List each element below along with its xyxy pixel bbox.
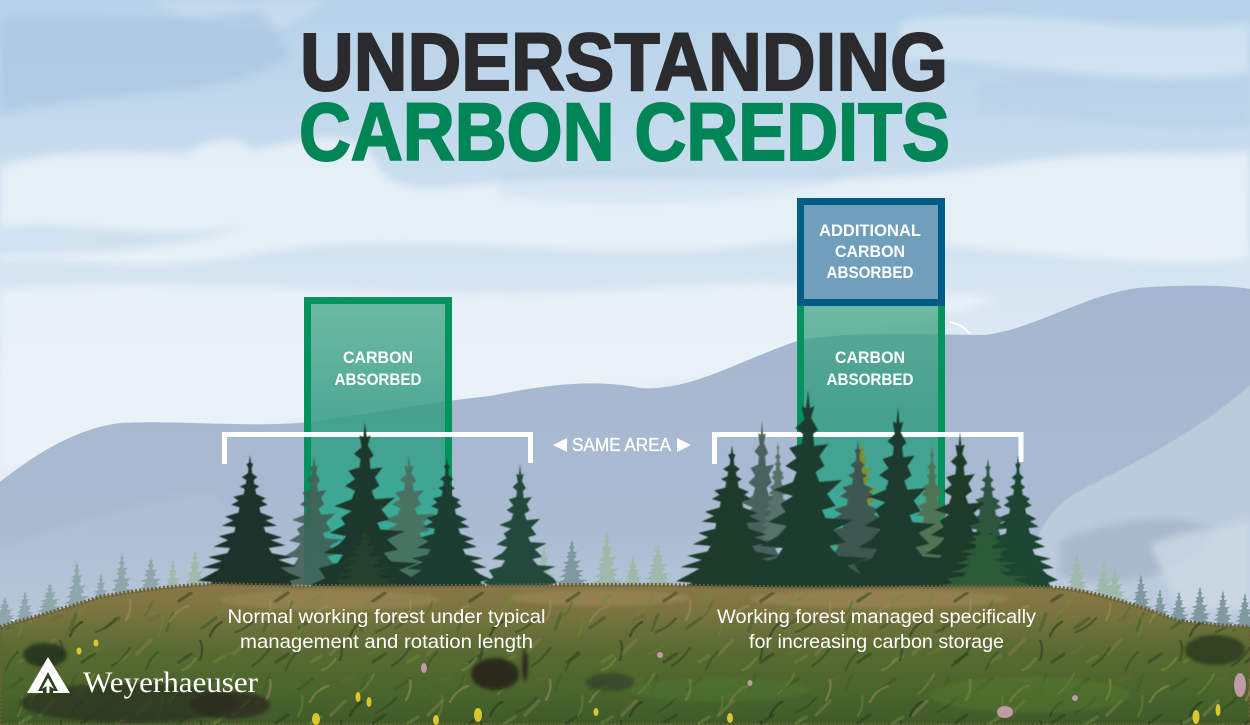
title: CARBON CREDITS — [299, 87, 950, 178]
distant tree line — [0, 530, 1250, 630]
description: carbon-managed forest — [717, 606, 1036, 653]
left area bracket — [224, 434, 530, 464]
additional carbon box: CARBON — [835, 243, 905, 261]
Weyerhaeuser logo: Weyerhaeuser — [83, 666, 258, 699]
additional carbon box: ABSORBED — [826, 264, 914, 282]
title: UNDERSTANDING — [300, 17, 948, 108]
description: normal working forest: Normal working forest under typical — [228, 606, 546, 628]
same area label: SAME AREA — [572, 435, 671, 455]
mountains — [0, 286, 1250, 625]
left carbon bar: ABSORBED — [334, 371, 422, 389]
right bar label: CARBON — [835, 349, 905, 367]
description: carbon-managed forest: Working forest managed specifically — [717, 606, 1036, 628]
clouds — [0, 0, 1250, 470]
left bar label: CARBON — [343, 349, 413, 367]
description: normal working forest: management and rotation length — [240, 631, 533, 653]
additional carbon box — [800, 202, 942, 302]
title — [299, 17, 950, 178]
description: carbon-managed forest: for increasing carbon storage — [749, 631, 1004, 653]
additional carbon box: ADDITIONAL — [819, 222, 921, 240]
right area bracket — [714, 434, 1021, 464]
meadow hill — [0, 584, 1250, 725]
Weyerhaeuser logo — [27, 657, 258, 699]
right carbon bar — [797, 303, 945, 585]
description: normal working forest — [228, 606, 546, 653]
right tree group — [676, 390, 1058, 590]
left tree group — [198, 422, 557, 590]
right carbon bar: ABSORBED — [826, 371, 914, 389]
left carbon bar — [304, 297, 452, 585]
